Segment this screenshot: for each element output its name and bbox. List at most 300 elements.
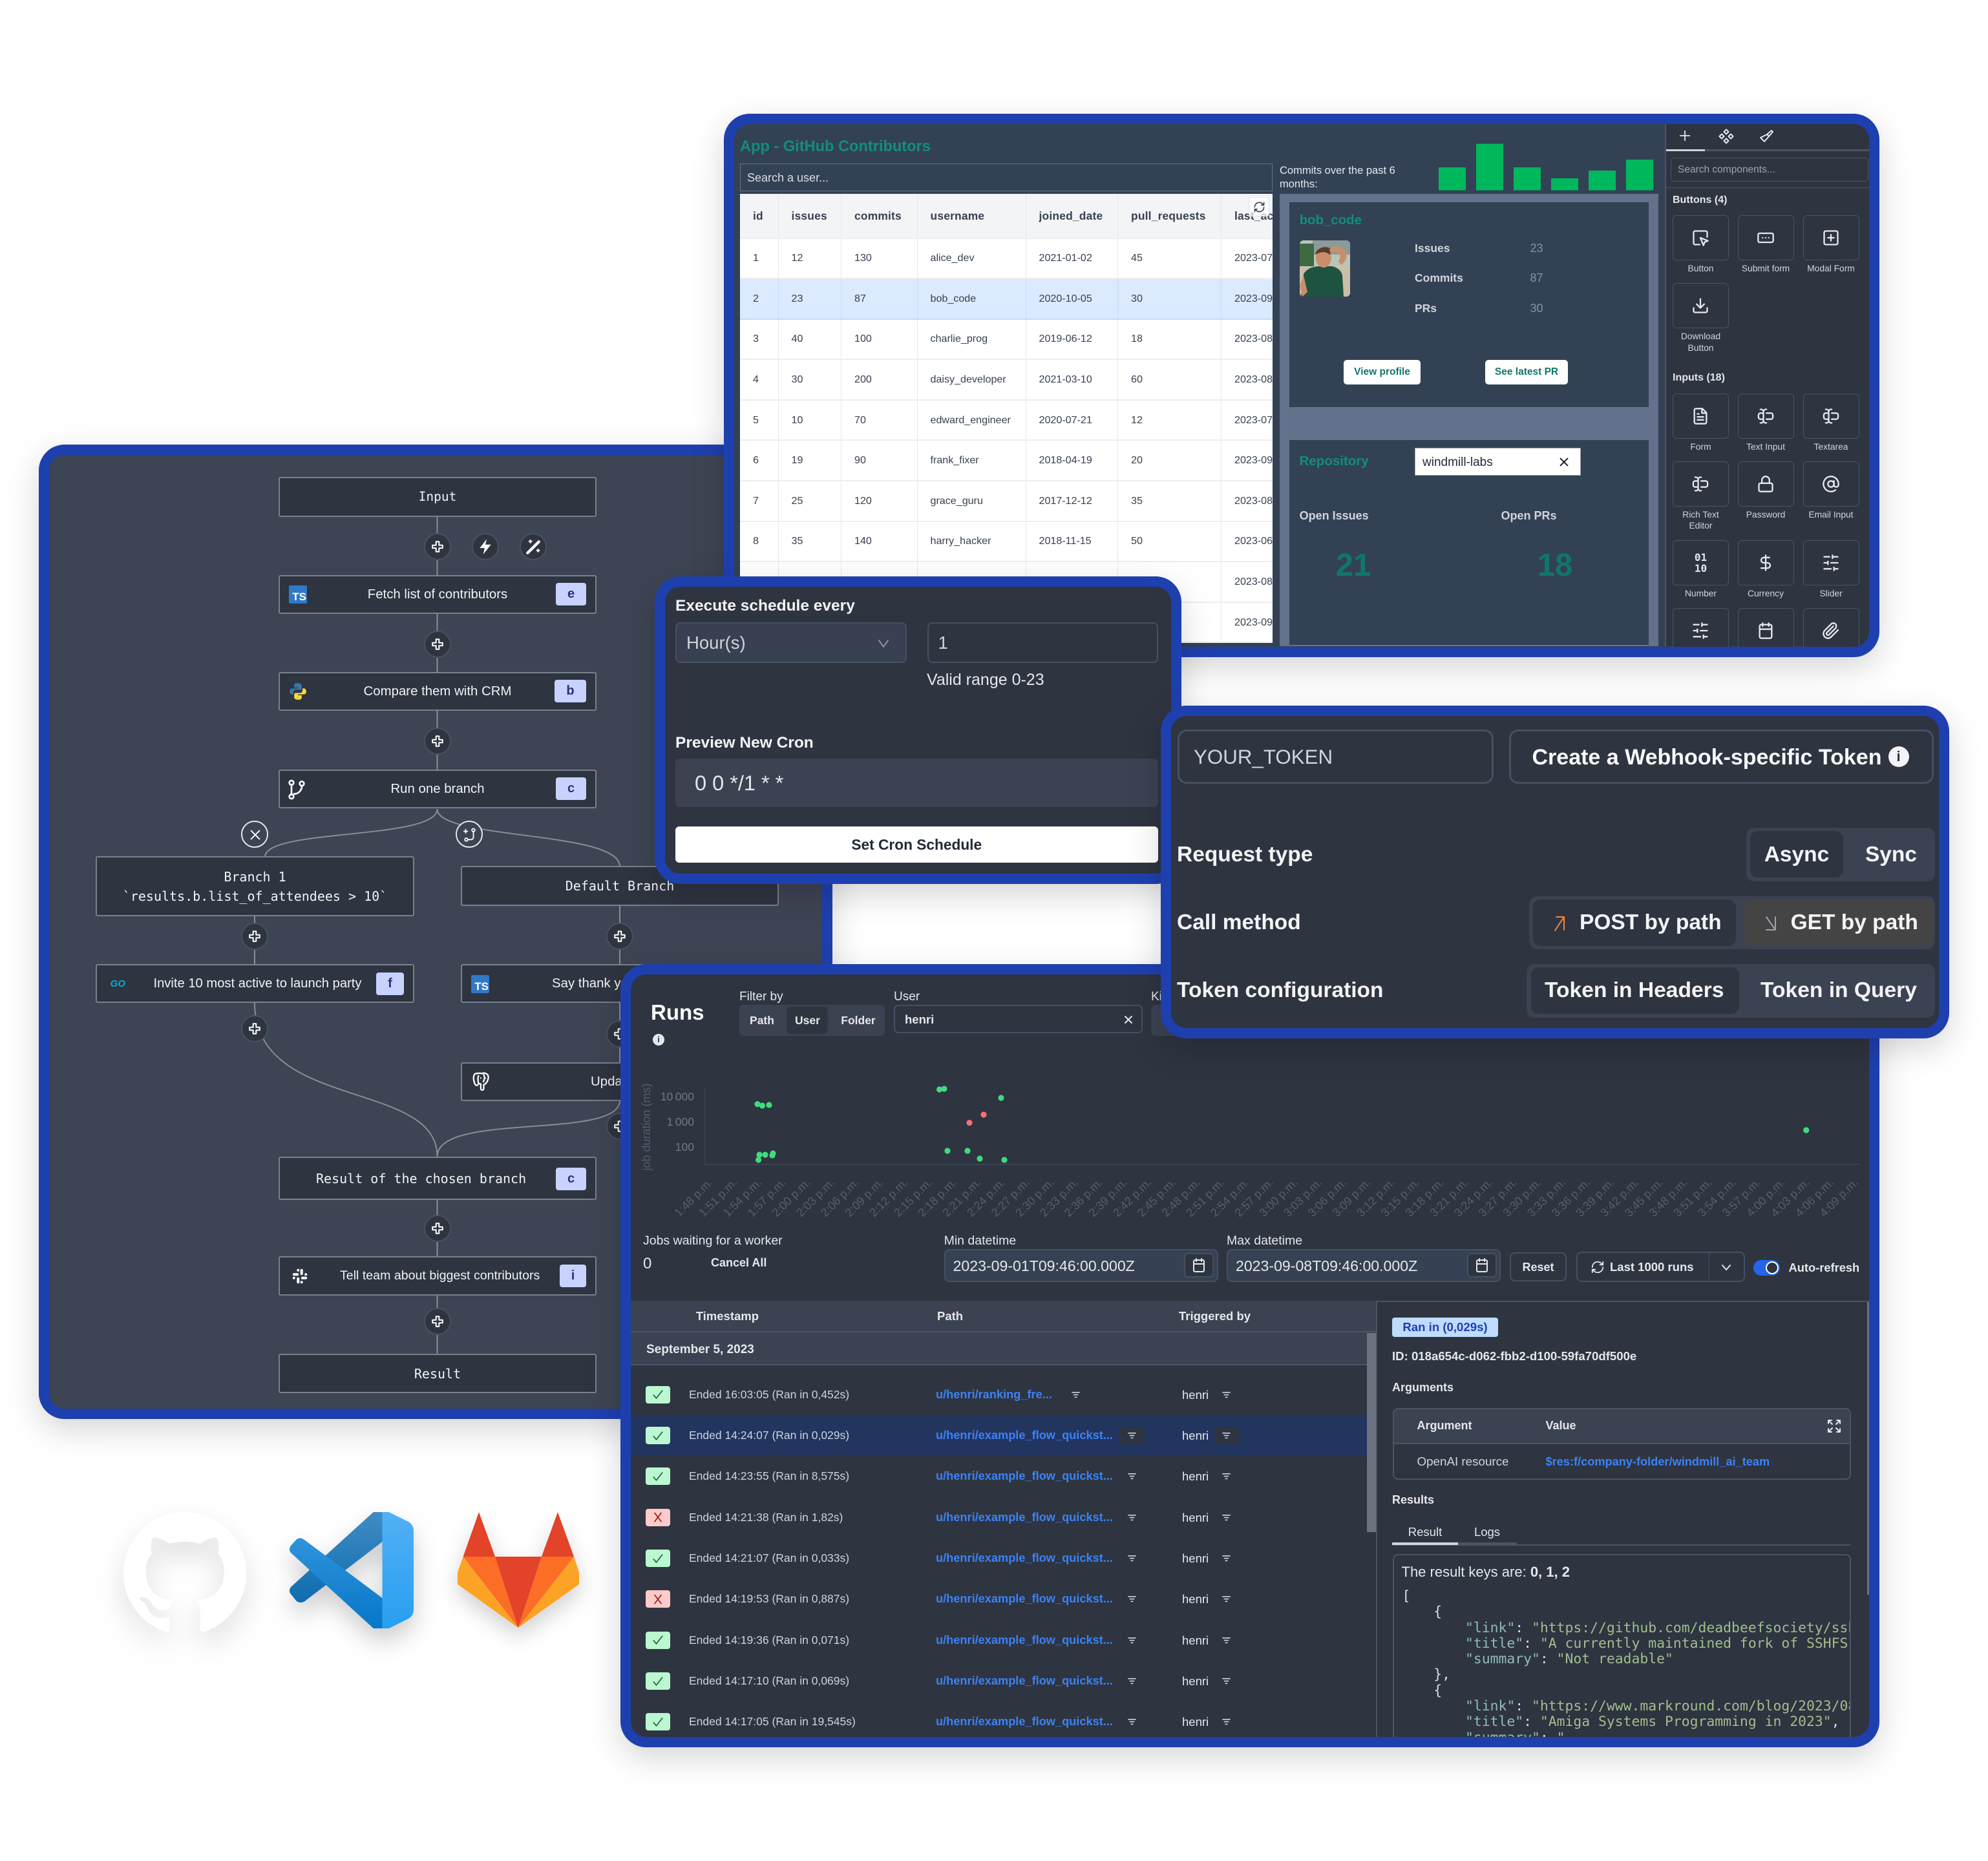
icon: Slack xyxy=(292,1269,308,1283)
input: token: YOUR_TOKEN xyxy=(1194,746,1333,768)
icon: Go: GO xyxy=(111,978,125,989)
toggle: request type: Async xyxy=(1764,843,1829,867)
chart: job duration scatter: 2:30 p.m. xyxy=(1013,1176,1057,1219)
label: auto-refresh: Auto-refresh xyxy=(1789,1261,1859,1274)
chart: job duration scatter: 10 000 xyxy=(661,1090,694,1103)
tabs: result and logs: Logs xyxy=(1474,1525,1500,1539)
button: reset: Reset xyxy=(1522,1261,1554,1274)
node: Branch 1: Branch 1 `results.b.list_of_attendees > 10` xyxy=(123,868,387,903)
run row: 14:21:07 xyxy=(646,1550,1231,1567)
toggle: token configuration xyxy=(1527,964,1935,1018)
contributors table: 12 xyxy=(1131,414,1143,426)
icon: TypeScript xyxy=(289,585,307,604)
component search: Search components... xyxy=(1678,164,1775,175)
badge: e: e xyxy=(567,587,575,601)
badge: ran in xyxy=(1392,1318,1498,1337)
contributors table: 3 xyxy=(753,333,759,344)
repository input: windmill-labs xyxy=(1422,455,1493,469)
badge: b: b xyxy=(566,684,575,698)
contributors table: 100 xyxy=(854,333,872,344)
component: Download Button xyxy=(1673,283,1729,353)
component: Range xyxy=(1673,608,1729,647)
chart: job duration scatter: 2:03 p.m. xyxy=(794,1176,837,1219)
label: open PRs: Open PRs xyxy=(1501,509,1557,522)
node: Result of the chosen branch xyxy=(279,1157,597,1200)
node: Branch 1 xyxy=(96,856,414,916)
run row: 14:21:07: u/henri/example_flow_quickst... xyxy=(936,1551,1113,1564)
table header: Triggered by xyxy=(1179,1309,1251,1323)
run row: 14:17:10: u/henri/example_flow_quickst... xyxy=(936,1674,1113,1687)
button: remove branch xyxy=(241,821,268,848)
chart: job duration scatter: 1:51 p.m. xyxy=(696,1176,740,1219)
contributors table: daisy_developer xyxy=(931,373,1006,385)
contributors table: 1 xyxy=(753,252,759,264)
run id: ID: 018a654c-d062-fbb2-d100-59fa70df500e xyxy=(1392,1349,1636,1363)
chart: job duration scatter: 2:33 p.m. xyxy=(1037,1176,1081,1219)
contributors table: 6 xyxy=(753,454,759,466)
contributors table: 2018-04-19 xyxy=(1039,454,1092,466)
select: hours: Hour(s) xyxy=(686,633,746,653)
chart: job duration scatter xyxy=(640,1083,1861,1219)
panel: flow editor xyxy=(39,445,832,1419)
icon: TypeScript: TS xyxy=(292,591,306,603)
chart: job duration scatter: 3:36 p.m. xyxy=(1549,1176,1592,1219)
panel: details container xyxy=(1280,194,1658,646)
chart: job duration scatter: 2:48 p.m. xyxy=(1159,1176,1203,1219)
bar chart: commits xyxy=(1439,143,1653,190)
chart: job duration scatter: 3:54 p.m. xyxy=(1695,1176,1739,1219)
chart: job duration scatter: 2:18 p.m. xyxy=(916,1176,959,1219)
heading: preview: Preview New Cron xyxy=(675,734,814,752)
node: Fetch list of contributors: Fetch list of contributors xyxy=(368,587,507,601)
label: jobs waiting: Jobs waiting for a worker xyxy=(643,1234,783,1248)
input: token xyxy=(1178,730,1494,784)
run row: 14:21:38 failed: henri xyxy=(1182,1511,1209,1524)
tabs: result and logs xyxy=(1392,1520,1850,1546)
input: max datetime: 2023-09-08T09:46:00.000Z xyxy=(1236,1257,1417,1274)
contributors table: 60 xyxy=(1131,373,1143,385)
arguments table: $res:f/company-folder/windmill_ai_team xyxy=(1546,1455,1770,1468)
chart: job duration scatter: 4:03 p.m. xyxy=(1768,1176,1812,1219)
chart: job duration scatter: 2:36 p.m. xyxy=(1062,1176,1105,1219)
logo: VS Code xyxy=(284,1512,425,1649)
contributors table: 20 xyxy=(1131,454,1143,466)
contributors table: 120 xyxy=(854,495,872,507)
run row: 14:19:53 failed: u/henri/example_flow_quickst... xyxy=(936,1592,1113,1605)
contributors table: 2021-03-10 xyxy=(1039,373,1092,385)
label: user: User xyxy=(894,990,920,1004)
component: Email Input xyxy=(1803,461,1859,520)
stat: commits xyxy=(1415,271,1543,284)
component: Text Input: Text Input xyxy=(1746,442,1785,452)
run row: 14:19:36 xyxy=(646,1632,1231,1649)
chart: job duration scatter: 3:21 p.m. xyxy=(1427,1176,1471,1219)
badge: c xyxy=(556,1168,586,1190)
label: open issues: Open Issues xyxy=(1300,509,1369,522)
contributors table: 35 xyxy=(791,535,803,547)
node: Update: Update xyxy=(591,1074,633,1088)
contributors table: 2020-10-05 xyxy=(1039,293,1092,304)
run row: 16:03:05: u/henri/ranking_fre... xyxy=(936,1388,1052,1401)
chart: job duration scatter: 2:27 p.m. xyxy=(989,1176,1032,1219)
node: Say thank you: Say thank you xyxy=(552,976,635,990)
input: min datetime: 2023-09-01T09:46:00.000Z xyxy=(953,1257,1135,1274)
button: set cron schedule: Set Cron Schedule xyxy=(851,836,982,853)
heading: Runs: Runs xyxy=(651,1000,704,1024)
button: add step xyxy=(606,923,633,950)
contributors table: charlie_prog xyxy=(931,333,988,344)
stat: commits: Commits xyxy=(1415,271,1463,284)
run row: 14:19:53 failed xyxy=(646,1590,1231,1608)
chart: job duration scatter: 2:12 p.m. xyxy=(867,1176,910,1219)
button: add step xyxy=(424,1308,451,1335)
node: Result of the chosen branch: Result of the chosen branch xyxy=(316,1171,526,1186)
cron preview xyxy=(675,759,1158,807)
contributors table: commits xyxy=(854,209,902,222)
run row: 16:03:05: henri xyxy=(1182,1388,1209,1402)
component: Button xyxy=(1673,215,1729,273)
run row: 14:24:07 selected: u/henri/example_flow_quickst... xyxy=(936,1429,1113,1442)
run row: 14:24:07 selected xyxy=(631,1415,1367,1456)
component: File xyxy=(1803,608,1859,647)
icon: TypeScript: TS xyxy=(474,980,489,993)
stat: PRs: 30 xyxy=(1530,301,1543,314)
chart: job duration scatter: 3:15 p.m. xyxy=(1379,1176,1422,1219)
chart: job duration scatter: 3:18 p.m. xyxy=(1403,1176,1446,1219)
chart: job duration scatter: 2:42 p.m. xyxy=(1110,1176,1154,1219)
chart: job duration scatter: job duration (ms) xyxy=(640,1083,653,1172)
chart: job duration scatter: 1:54 p.m. xyxy=(721,1176,764,1219)
node: Compare them with CRM: Compare them with CRM xyxy=(364,684,511,698)
component: Number: Number xyxy=(1685,589,1717,598)
button: cancel all: Cancel All xyxy=(711,1256,767,1269)
stat: issues xyxy=(1415,242,1543,255)
contributors table: 18 xyxy=(1131,333,1143,344)
run row: 14:17:10: Ended 14:17:10 (Ran in 0,069s) xyxy=(689,1674,849,1687)
badge: c: c xyxy=(567,1172,575,1186)
search input xyxy=(740,163,1273,191)
input: interval xyxy=(927,622,1158,663)
run row: 14:21:38 failed xyxy=(646,1509,1231,1526)
chart: job duration scatter: 3:45 p.m. xyxy=(1622,1176,1665,1219)
toggle: filter by: User xyxy=(795,1014,820,1027)
panel: run detail xyxy=(1376,1301,1869,1740)
icon: TypeScript xyxy=(471,975,489,993)
input: min datetime xyxy=(944,1248,1218,1282)
label: request type: Request type xyxy=(1177,843,1313,867)
contributors table: 23 xyxy=(791,293,803,304)
badge: b xyxy=(555,680,586,702)
chart: job duration scatter: 3:27 p.m. xyxy=(1476,1176,1519,1219)
label: call method: Call method xyxy=(1177,910,1301,934)
contributors table: 4 xyxy=(753,373,759,385)
input: max datetime xyxy=(1227,1248,1501,1282)
contributors table: grace_guru xyxy=(931,495,983,507)
node: Run one branch: Run one branch xyxy=(390,782,485,796)
chart: job duration scatter: 1:48 p.m. xyxy=(672,1176,715,1219)
node: Default Branch: Default Branch xyxy=(566,878,674,894)
chart: job duration scatter: 1 000 xyxy=(667,1115,694,1128)
toggle: kind xyxy=(1151,1005,1229,1036)
chart: job duration scatter: 4:00 p.m. xyxy=(1744,1176,1788,1219)
chart: job duration scatter: 2:45 p.m. xyxy=(1135,1176,1178,1219)
select: hours xyxy=(675,622,907,663)
button: last 1000 runs: Last 1000 runs xyxy=(1610,1260,1694,1274)
toggle: auto-refresh xyxy=(1753,1260,1780,1276)
button: trigger bolt xyxy=(472,533,499,560)
stat: PRs xyxy=(1415,301,1543,314)
toggle: call method: POST by path xyxy=(1580,910,1722,934)
toggle: filter by: Folder xyxy=(841,1014,876,1027)
toggle: filter by xyxy=(739,1005,885,1036)
badge: i: i xyxy=(571,1268,575,1283)
run row: 16:03:05 xyxy=(646,1386,1231,1404)
commits caption: Commits over the past 6 months: xyxy=(1280,165,1395,190)
button: set cron schedule xyxy=(675,826,1158,863)
toggle: request type: Sync xyxy=(1865,843,1917,867)
run row: 14:17:10: henri xyxy=(1182,1674,1209,1688)
tabs: result and logs: Result xyxy=(1408,1525,1442,1539)
contributors table: frank_fixer xyxy=(931,454,979,466)
component: Rich Text Editor xyxy=(1673,461,1729,531)
chart: job duration scatter: 3:24 p.m. xyxy=(1452,1176,1495,1219)
arguments table: Value xyxy=(1546,1419,1576,1432)
node: Say thank you xyxy=(461,964,779,1003)
icon: info: i xyxy=(657,1035,660,1044)
button: add step xyxy=(424,631,451,658)
stat: issues: 23 xyxy=(1530,242,1543,255)
component: Text Input xyxy=(1738,394,1794,452)
component: Textarea xyxy=(1803,394,1859,452)
contributors table: 19 xyxy=(791,454,803,466)
contributors table: 140 xyxy=(854,535,872,547)
chart: job duration scatter: 4:06 p.m. xyxy=(1793,1176,1836,1219)
contributors table: 2 xyxy=(753,293,759,304)
chart: job duration scatter: 3:42 p.m. xyxy=(1598,1176,1641,1219)
toggle: token configuration: Token in Query xyxy=(1761,978,1917,1002)
chart: job duration scatter: 2:24 p.m. xyxy=(964,1176,1008,1219)
date group heading xyxy=(631,1332,1377,1365)
node: Invite 10 most active to launch party: Invite 10 most active to launch party xyxy=(153,976,362,990)
table header: Timestamp xyxy=(696,1309,759,1323)
component: Modal Form xyxy=(1803,215,1859,273)
node: Invite 10 most active to launch party xyxy=(96,964,414,1003)
repository input xyxy=(1415,447,1581,476)
run row: 14:19:53 failed: Ended 14:19:53 (Ran in 0,887s) xyxy=(689,1592,849,1605)
chart: job duration scatter: 3:12 p.m. xyxy=(1354,1176,1397,1219)
component: Number xyxy=(1673,540,1729,598)
result box xyxy=(1392,1554,1851,1761)
node: Tell team about biggest contributors: Tell team about biggest contributors xyxy=(340,1268,540,1283)
run row: 14:23:55: u/henri/example_flow_quickst... xyxy=(936,1469,1113,1482)
contributors table: alice_dev xyxy=(931,252,975,264)
chart: job duration scatter: 3:00 p.m. xyxy=(1256,1176,1300,1219)
button: add step xyxy=(424,1215,451,1242)
contributors table: 30 xyxy=(1131,293,1143,304)
node: Input xyxy=(279,477,597,517)
run row: 14:21:38 failed: u/henri/example_flow_quickst... xyxy=(936,1511,1113,1524)
button: view profile xyxy=(1344,360,1421,384)
contributors table xyxy=(740,194,1273,643)
contributors table: 2021-01-02 xyxy=(1039,252,1092,264)
contributors table: 12 xyxy=(791,252,803,264)
heading: execute schedule: Execute schedule every xyxy=(675,597,855,615)
component: Date xyxy=(1738,608,1794,647)
label: token configuration: Token configuration xyxy=(1177,978,1383,1002)
button: add step xyxy=(424,728,451,755)
repository label: Repository xyxy=(1300,454,1369,468)
app title: App - GitHub Contributors xyxy=(740,138,931,155)
contributors table: 90 xyxy=(854,454,866,466)
component: Email Input: Email Input xyxy=(1808,509,1854,520)
chart: job duration scatter: 3:03 p.m. xyxy=(1281,1176,1324,1219)
badge: c xyxy=(556,777,586,800)
panel: runs xyxy=(620,964,1879,1747)
chart: job duration scatter: 100 xyxy=(675,1141,694,1153)
icon: branch xyxy=(288,779,305,800)
component: Slider xyxy=(1803,540,1859,598)
chart: job duration scatter: 2:21 p.m. xyxy=(940,1176,984,1219)
button: see latest PR xyxy=(1485,360,1568,384)
logo: GitHub xyxy=(116,1537,253,1645)
contributors table: 8 xyxy=(753,535,759,547)
label: min datetime: Min datetime xyxy=(944,1234,1016,1248)
input: user: henri xyxy=(905,1013,934,1026)
input: user xyxy=(894,1005,1143,1033)
component: Textarea: Textarea xyxy=(1814,442,1848,452)
chart: job duration scatter: 2:06 p.m. xyxy=(818,1176,862,1219)
node: Fetch list of contributors xyxy=(279,575,597,614)
panel: component sidebar xyxy=(1665,124,1869,646)
stat: commits: 87 xyxy=(1530,271,1543,284)
component: Currency xyxy=(1738,540,1794,598)
node: Input: Input xyxy=(419,489,456,504)
run row: 14:19:36: henri xyxy=(1182,1634,1209,1647)
logo: GitLab xyxy=(450,1512,587,1641)
value: jobs waiting: 0 xyxy=(643,1255,651,1272)
component: Slider: Slider xyxy=(1819,589,1843,598)
chart: job duration scatter: 2:39 p.m. xyxy=(1086,1176,1130,1219)
run row: 14:21:07: henri xyxy=(1182,1551,1209,1565)
table header xyxy=(631,1301,1377,1332)
button: create token xyxy=(1508,730,1934,784)
badge: ran in: Ran in (0,029s) xyxy=(1402,1320,1488,1334)
badge: i xyxy=(560,1265,586,1287)
panel: app GitHub contributors xyxy=(724,114,1879,657)
contributors table: 2020-07-21 xyxy=(1039,414,1092,426)
heading: results: Results xyxy=(1392,1493,1434,1506)
run row: 14:19:36: u/henri/example_flow_quickst... xyxy=(936,1634,1113,1646)
node: Update xyxy=(461,1062,779,1101)
contributors table: 25 xyxy=(791,495,803,507)
button: add step xyxy=(424,533,451,560)
button: add step xyxy=(241,1015,268,1042)
contributors table: id xyxy=(753,209,763,222)
contributors table: 2017-12-12 xyxy=(1039,495,1092,507)
badge: e xyxy=(556,583,586,605)
contributors table: 200 xyxy=(854,373,872,385)
contributors table: joined_date xyxy=(1039,209,1103,222)
chart: job duration scatter: 3:09 p.m. xyxy=(1330,1176,1373,1219)
component search xyxy=(1671,158,1868,182)
run row: 14:17:10 xyxy=(646,1672,1231,1690)
component: Modal Form: Modal Form xyxy=(1807,264,1855,273)
component: Number: 01 xyxy=(1695,551,1707,563)
toggle: call method xyxy=(1529,896,1935,949)
search input: Search a user... xyxy=(747,171,829,184)
button: AI wand xyxy=(520,533,547,560)
user name: bob_code xyxy=(1300,213,1362,227)
component: Form xyxy=(1673,394,1729,452)
hint: valid range: Valid range 0-23 xyxy=(927,671,1044,689)
run row: 14:17:05 xyxy=(646,1713,1231,1730)
component: Form: Form xyxy=(1690,442,1711,452)
chart: job duration scatter: 3:48 p.m. xyxy=(1647,1176,1690,1219)
node: Compare them with CRM xyxy=(279,672,597,711)
node: Tell team about biggest contributors xyxy=(279,1256,597,1295)
tab icons xyxy=(1679,129,1773,144)
contributors table: 10 xyxy=(791,414,803,426)
chart: job duration scatter: 3:06 p.m. xyxy=(1306,1176,1349,1219)
button: see latest PR: See latest PR xyxy=(1495,366,1558,377)
component: Download Button: Button xyxy=(1688,342,1713,353)
icon: info xyxy=(1888,746,1909,767)
label: filter by: Filter by xyxy=(739,990,783,1004)
contributors table: issues xyxy=(791,209,827,222)
run row: 16:03:05: Ended 16:03:05 (Ran in 0,452s) xyxy=(689,1388,849,1401)
toggle: token configuration: Token in Headers xyxy=(1545,978,1724,1002)
component: Rich Text Editor: Editor xyxy=(1689,521,1713,531)
heading: arguments: Arguments xyxy=(1392,1381,1454,1394)
contributors table: 5 xyxy=(753,414,759,426)
component: Submit form: Submit form xyxy=(1742,264,1790,273)
panel: webhook xyxy=(1161,706,1949,1038)
badge: f xyxy=(376,973,404,995)
date group heading: September 5, 2023 xyxy=(646,1343,754,1356)
run row: 14:17:05: u/henri/example_flow_quickst... xyxy=(936,1715,1113,1728)
icon: info xyxy=(653,1034,664,1046)
run row: 14:21:07: Ended 14:21:07 (Ran in 0,033s) xyxy=(689,1551,849,1564)
card: user profile xyxy=(1289,202,1649,407)
chart: job duration scatter: 2:00 p.m. xyxy=(769,1176,813,1219)
component: Button: Button xyxy=(1688,264,1713,273)
component: Submit form xyxy=(1738,215,1794,273)
heading: Inputs: Inputs (18) xyxy=(1673,372,1725,383)
run row: 14:23:55: Ended 14:23:55 (Ran in 8,575s) xyxy=(689,1469,849,1482)
contributors table: bob_code xyxy=(931,293,976,304)
contributors table: 45 xyxy=(1131,252,1143,264)
contributors table: 30 xyxy=(791,373,803,385)
chart: job duration scatter: 3:33 p.m. xyxy=(1525,1176,1568,1219)
run row: 14:19:36: Ended 14:19:36 (Ran in 0,071s) xyxy=(689,1634,849,1646)
button: add step xyxy=(241,923,268,950)
run row: 14:24:07 selected: henri xyxy=(1182,1429,1209,1442)
scrollbar: runs list xyxy=(1367,1333,1376,1532)
arguments table: OpenAI resource xyxy=(1417,1455,1508,1468)
chart: job duration scatter: 2:54 p.m. xyxy=(1208,1176,1251,1219)
contributors table: username xyxy=(931,209,984,222)
button: reset xyxy=(1510,1252,1567,1281)
icon: Python xyxy=(290,683,306,700)
chart: job duration scatter: 2:51 p.m. xyxy=(1183,1176,1227,1219)
component: Number: 10 xyxy=(1695,562,1707,574)
card: repository xyxy=(1289,440,1649,645)
chart: job duration scatter: 1:57 p.m. xyxy=(745,1176,788,1219)
icon: Postgres xyxy=(473,1072,489,1091)
node: Run one branch xyxy=(279,770,597,808)
contributors table: edward_engineer xyxy=(931,414,1011,426)
run row: 14:19:53 failed: henri xyxy=(1182,1592,1209,1606)
